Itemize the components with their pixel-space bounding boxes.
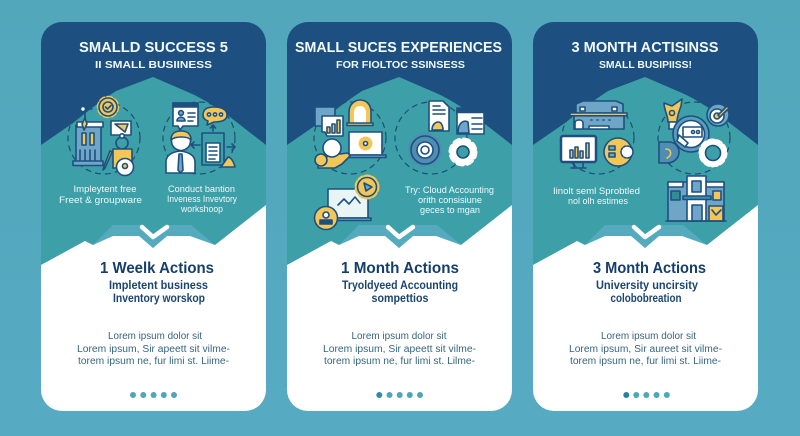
panel: card 1 week	[41, 22, 266, 411]
card 3 caption	[553, 186, 640, 207]
icon: document and gears	[395, 101, 484, 174]
card 2 caption: orith consisiune	[418, 195, 482, 206]
card 3 background	[533, 22, 758, 411]
card 2 body text: Lorem ipsum dolor sit	[352, 331, 447, 342]
card 2 subheading: Tryoldyeed Accounting	[342, 280, 458, 292]
card 3 caption: Iinolt seml Sprobtled	[553, 186, 640, 197]
card 1 subheading: Inventory worskop	[113, 293, 205, 305]
card 2 subheading	[342, 280, 458, 305]
card 3 pagination dots	[623, 392, 670, 398]
card 1 subheading	[109, 280, 208, 305]
card 2 heading: 1 Month Actions	[341, 260, 459, 277]
card 1 subtitle: II SMALL BUSIINESS	[95, 59, 212, 71]
card 1 body text	[77, 331, 230, 367]
card 2 background	[287, 22, 512, 411]
card 1 right caption: workshoop	[180, 204, 223, 215]
card 3 subtitle: SMALL BUSIPIISS!	[599, 59, 692, 71]
card 3 caption: nol olh estimes	[568, 196, 628, 207]
card 1 right caption: Inveness Invevtory	[167, 194, 237, 205]
card 2 caption: Try: Cloud Accounting	[405, 185, 494, 196]
card 3 body text: torem ipsum ne, fur limi st. Liime-	[570, 356, 721, 367]
card 3 body text: Lorem ipsum dolor sit	[601, 331, 696, 342]
card 1 background	[41, 22, 266, 411]
card 3 subheading: University uncirsity	[596, 280, 699, 292]
icon: laptop with trend line and gear	[314, 177, 377, 230]
icon: office building and tools	[68, 98, 140, 176]
icon: person and inventory shelf	[163, 102, 235, 174]
card 3 title: 3 MONTH ACTISINSS	[572, 40, 719, 56]
card 1 right caption: Conduct bantion	[168, 184, 235, 195]
card 1 body text: torem ipsum ne, fur limi st. Liime-	[78, 356, 229, 367]
icon: university and monitor chart	[561, 101, 634, 174]
card 1 pagination dots	[130, 392, 177, 398]
card 2 caption: geces to mgan	[420, 205, 480, 216]
card 2 body text	[323, 331, 476, 367]
card 1 title: SMALLD SUCCESS 5	[79, 40, 228, 56]
panel: card 1 month	[287, 22, 512, 411]
card 3 subheading	[596, 280, 699, 305]
card 2 pagination dots	[376, 392, 423, 398]
card 3 body text	[569, 331, 722, 367]
card 3 subheading: colobobreation	[610, 293, 682, 305]
card 2 body text: torem ipsum ne, fur limi st. Lilme-	[324, 356, 475, 367]
card 2 subheading: sompettios	[372, 293, 428, 305]
card 2 caption	[405, 185, 494, 216]
card 3 heading: 3 Month Actions	[593, 260, 706, 277]
card 2 subtitle: FOR FIOLTOC SSINSESS	[336, 59, 465, 71]
card 1 left caption: Freet & groupware	[59, 195, 142, 206]
card 1 body text: Lorem ipsum dolor sit	[108, 331, 202, 342]
panel: card 3 month	[533, 22, 758, 411]
icon: presenter with laptop and chart	[314, 100, 386, 174]
card 1 left caption	[59, 184, 142, 206]
icon: office storefront	[666, 176, 726, 221]
card 2 title: SMALL SUCES EXPERIENCES	[295, 40, 502, 56]
card 1 heading: 1 Weelk Actions	[100, 260, 214, 277]
card 1 right caption	[167, 184, 237, 215]
card 3 body text: Lorem ipsum, Sir aureet sit vilme-	[569, 344, 722, 355]
card 2 body text: Lorem ipsum, Sir apeett sit vilme-	[323, 344, 476, 355]
card 1 subheading: Impletent business	[109, 280, 208, 292]
card 1 left caption: Impleytent free	[74, 184, 136, 195]
icon: idea bulb, target and gears	[658, 99, 730, 174]
card 1 body text: Lorem ipsum, Sir apeett sit vilme-	[77, 344, 230, 355]
